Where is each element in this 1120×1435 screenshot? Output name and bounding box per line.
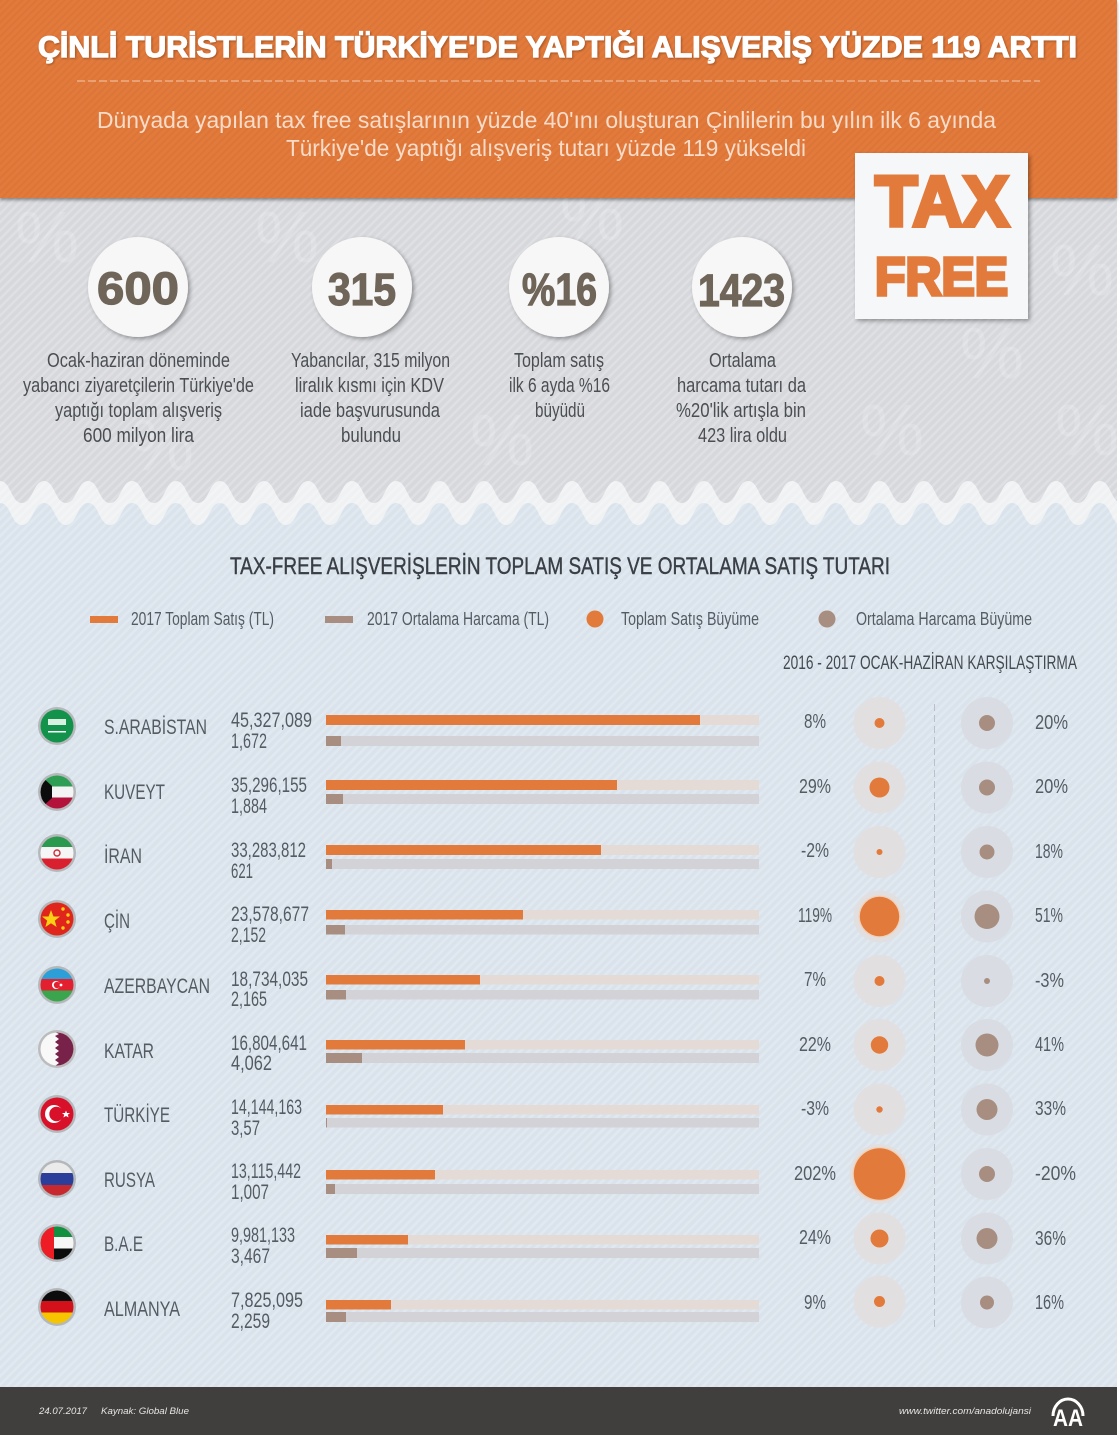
row: S.Arabistan: 45,327,089 — [231, 709, 312, 732]
row: B.A.E: 36% — [1035, 1228, 1066, 1250]
row: Azerbaycan: 7% — [804, 969, 826, 991]
stat: 600: Ocak-haziran döneminde — [47, 350, 230, 372]
flag: Saudi Arabia — [38, 707, 76, 745]
title: ÇİNLİ TURİSTLERİN TÜRKİYE'DE YAPTIĞI ALIŞVERİŞ YÜZDE 119 ARTTI — [38, 30, 1077, 64]
watermark percent signs: % — [255, 198, 319, 278]
row: Almanya: 16% — [1035, 1292, 1064, 1314]
row: Türkiye: 14,144,163 — [231, 1096, 302, 1119]
stat: 1423: 1423 — [698, 265, 785, 316]
legend — [90, 609, 1032, 629]
row: Türkiye: TÜRKİYE — [104, 1104, 170, 1127]
row: Kuveyt: 35,296,155 — [231, 774, 307, 797]
row: Kuveyt: 20% — [1035, 776, 1068, 798]
stat: 1423: %20'lik artışla bin — [676, 400, 806, 422]
stat: %16 — [509, 237, 610, 422]
stat: 600: 600 milyon lira — [83, 425, 195, 447]
stat: 315 — [291, 237, 450, 447]
watermark percent signs: % — [130, 406, 194, 486]
stat: 600: 600 — [97, 263, 179, 314]
stat: %16: ilk 6 ayda %16 — [509, 375, 610, 397]
subtitle: Dünyada yapılan tax free satışlarının yüzde 40'ını oluşturan Çinlilerin bu yılın ilk 6 ayında — [97, 107, 996, 133]
row: Türkiye: 33% — [1035, 1098, 1066, 1120]
row: Çin: ÇİN — [104, 910, 130, 933]
row: Katar: 16,804,641 — [231, 1032, 307, 1055]
white wave band — [0, 198, 1120, 525]
row: Türkiye: -3% — [801, 1098, 829, 1120]
flag: Russia — [38, 1160, 76, 1198]
legend: 2017 Toplam Satış (TL) — [131, 609, 274, 629]
row: Türkiye — [38, 1084, 1066, 1140]
row: S.Arabistan: 8% — [804, 711, 826, 733]
row: B.A.E: 24% — [799, 1227, 831, 1249]
watermark percent signs: % — [560, 176, 624, 256]
stat: 315: iade başvurusunda — [300, 400, 441, 422]
row: Kuveyt: KUVEYT — [104, 781, 165, 804]
stat: 1423 — [676, 237, 807, 447]
row: Azerbaycan: AZERBAYCAN — [104, 975, 210, 998]
row: İran: -2% — [801, 840, 829, 862]
row: İran: 33,283,812 — [231, 839, 306, 862]
flag: Azerbaijan — [38, 966, 76, 1004]
row: Katar — [38, 1019, 1064, 1075]
legend: Toplam Satış Büyüme — [621, 609, 759, 629]
stat: %16: büyüdü — [535, 400, 585, 422]
watermark percent signs: % — [960, 314, 1024, 394]
row: S.Arabistan: 20% — [1035, 712, 1068, 734]
legend: 2017 Ortalama Harcama (TL) — [367, 609, 549, 629]
flag: Iran — [38, 834, 76, 872]
row: Rusya: 202% — [794, 1163, 836, 1185]
tax free badge: TAX — [875, 163, 1009, 242]
row: B.A.E: 9,981,133 — [231, 1224, 295, 1247]
row: Katar: 41% — [1035, 1034, 1064, 1056]
watermark percent signs: % — [1055, 391, 1119, 471]
stat: 600: yaptığı toplam alışveriş — [55, 400, 222, 422]
watermark percent signs: % — [470, 401, 534, 481]
row: Çin: 23,578,677 — [231, 903, 309, 926]
footer bar — [0, 1387, 1117, 1435]
row: S.Arabistan: 1,672 — [231, 730, 267, 753]
row: Çin: 51% — [1035, 905, 1063, 927]
stat: %16: Toplam satış — [514, 350, 604, 372]
row: Almanya — [38, 1276, 1064, 1333]
row: Azerbaycan — [38, 955, 1064, 1011]
footer bar: www.twitter.com/anadolujansi — [899, 1406, 1032, 1416]
page background: lower blue area — [0, 470, 1117, 1395]
row: Kuveyt — [38, 762, 1068, 818]
stat: 315: liralık kısmı için KDV — [295, 375, 445, 397]
row: İran — [38, 826, 1063, 883]
row: İran: İRAN — [104, 845, 142, 868]
row: İran: 621 — [231, 860, 253, 883]
tax free badge — [855, 153, 1028, 319]
flag: UAE — [38, 1224, 76, 1262]
row: B.A.E — [38, 1212, 1066, 1268]
row: Çin: 2,152 — [231, 924, 266, 947]
row: Türkiye: 3,57 — [231, 1117, 260, 1140]
row: Çin: 119% — [798, 905, 832, 927]
row: Almanya: 2,259 — [231, 1310, 270, 1333]
watermark percent signs: % — [860, 391, 924, 471]
row: S.Arabistan: S.ARABİSTAN — [104, 716, 207, 739]
row: S.Arabistan — [38, 697, 1068, 753]
stat: %16: %16 — [522, 264, 597, 315]
row: Katar: KATAR — [104, 1040, 154, 1063]
stat: 315: Yabancılar, 315 milyon — [291, 350, 450, 372]
row: Rusya: RUSYA — [104, 1169, 155, 1192]
stat: 315: bulundu — [341, 425, 401, 447]
watermark percent signs — [15, 176, 1119, 486]
row: Rusya — [38, 1144, 1076, 1204]
grey stats background — [0, 198, 1120, 503]
row: Katar: 22% — [799, 1034, 831, 1056]
row: Almanya: ALMANYA — [104, 1298, 180, 1321]
watermark percent signs: % — [1050, 231, 1114, 311]
row: İran: 18% — [1035, 841, 1063, 863]
row: Kuveyt: 1,884 — [231, 795, 267, 818]
flag: Kuwait — [38, 773, 76, 811]
row: Çin — [38, 890, 1063, 947]
row: Rusya: -20% — [1035, 1163, 1076, 1185]
footer bar: 24.07.2017 — [38, 1406, 88, 1416]
row: Rusya: 13,115,442 — [231, 1160, 301, 1183]
header band — [0, 0, 1117, 198]
footer bar: Kaynak: Global Blue — [101, 1406, 189, 1416]
flag: China — [38, 900, 76, 938]
tax free badge: FREE — [875, 247, 1008, 307]
subtitle — [97, 107, 996, 161]
row: Azerbaycan: 18,734,035 — [231, 968, 308, 991]
flag: Qatar — [38, 1030, 76, 1068]
chart heading: TAX-FREE ALIŞVERİŞLERİN TOPLAM SATIŞ VE ORTALAMA SATIŞ TUTARI — [230, 553, 890, 580]
row: Almanya: 9% — [804, 1292, 826, 1314]
row: Kuveyt: 29% — [799, 776, 831, 798]
row: Azerbaycan: -3% — [1035, 970, 1064, 992]
stat: 1423: Ortalama — [709, 350, 777, 372]
stat: 1423: 423 lira oldu — [698, 425, 787, 447]
row: Katar: 4,062 — [231, 1052, 272, 1075]
stat: 600: yabancı ziyaretçilerin Türkiye'de — [23, 375, 254, 397]
row: Almanya: 7,825,095 — [231, 1289, 303, 1312]
watermark percent signs: % — [15, 198, 79, 278]
row: B.A.E: B.A.E — [104, 1233, 143, 1256]
flag: Turkey — [38, 1095, 76, 1133]
flag: Germany — [38, 1288, 76, 1326]
stat: 1423: harcama tutarı da — [677, 375, 807, 397]
icon: AA logo: AA — [1053, 1405, 1083, 1432]
stat: 315: 315 — [328, 264, 396, 315]
row: Rusya: 1,007 — [231, 1181, 269, 1204]
stat: 600 — [23, 237, 254, 447]
row: B.A.E: 3,467 — [231, 1245, 270, 1268]
subtitle: Türkiye'de yaptığı alışveriş tutarı yüzde 119 yükseldi — [286, 135, 806, 161]
legend: Ortalama Harcama Büyüme — [856, 609, 1032, 629]
row: Azerbaycan: 2,165 — [231, 988, 267, 1011]
